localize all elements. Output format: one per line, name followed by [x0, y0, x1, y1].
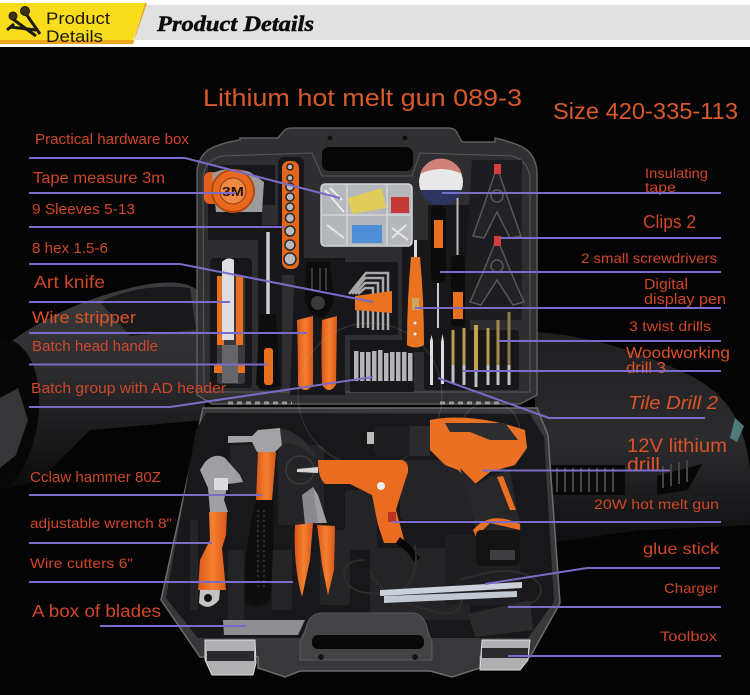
- header bar: [0, 0, 750, 47]
- label: Insulating tape: Insulating: [645, 165, 708, 181]
- handle opening: [322, 147, 413, 171]
- label: 8 hex 1.5-6: 8 hex 1.5-6: [32, 241, 108, 257]
- label: Clips 2: Clips 2: [643, 212, 696, 232]
- toolbox: lower tray: [161, 323, 560, 677]
- title: Lithium hot melt gun 089-3: [203, 85, 522, 112]
- tab label: [46, 9, 110, 46]
- label: Insulating tape: tape: [645, 179, 676, 195]
- label: 20W hot melt gun: 20W hot melt gun: [594, 496, 719, 512]
- label: adjustable wrench 8": adjustable wrench 8": [30, 516, 172, 531]
- label: 12V lithium drill: drill: [627, 455, 660, 476]
- label: Batch head handle: Batch head handle: [32, 339, 158, 355]
- tape measure: [204, 169, 264, 212]
- cords: [344, 545, 541, 613]
- screwdriver: [256, 232, 280, 388]
- label: 12V lithium drill: [483, 436, 727, 476]
- background car: left side: [0, 283, 205, 490]
- label: 9 Sleeves 5-13: 9 Sleeves 5-13: [32, 202, 135, 218]
- label: Digital display pen: Digital: [644, 276, 688, 293]
- label: Art knife: Art knife: [34, 272, 105, 292]
- moulded compartments: [190, 445, 520, 620]
- background car: right side: [535, 332, 750, 545]
- heading: Product Details: [156, 11, 314, 36]
- orange sleeve: [355, 291, 392, 313]
- label: Toolbox: Toolbox: [660, 628, 717, 644]
- clips: [470, 164, 524, 305]
- watermark rings: [286, 323, 520, 484]
- hex keys: [349, 273, 392, 330]
- latches: [205, 640, 256, 675]
- toolbox: upper lid: [197, 128, 537, 404]
- icon: crossed tools: [7, 6, 40, 36]
- tab label: Product: [46, 9, 110, 28]
- combination pliers: [295, 487, 335, 597]
- two small screwdrivers: [431, 198, 465, 328]
- label: Practical hardware box: [29, 132, 340, 198]
- yellow tab: [0, 3, 145, 44]
- charger: [468, 600, 533, 637]
- socket strip: [282, 161, 299, 269]
- art knife: [214, 258, 245, 384]
- label: glue stick: glue stick: [643, 541, 720, 558]
- glue gun: [297, 460, 417, 560]
- label: Charger: Charger: [664, 580, 718, 596]
- label: glue stick: [485, 541, 720, 584]
- cordless drill: [367, 418, 527, 566]
- label: Woodworking drill 3: Woodworking: [626, 345, 730, 362]
- right labels: [392, 165, 730, 656]
- batch bits: [354, 350, 412, 381]
- label: Batch group with AD header: [29, 377, 373, 407]
- label: Wire stripper: Wire stripper: [32, 308, 136, 327]
- label: 2 small screwdrivers: 2 small screwdrivers: [581, 250, 717, 266]
- left labels: [29, 132, 373, 626]
- label: Digital display pen: display pen: [644, 291, 726, 308]
- grey title band: [135, 5, 750, 40]
- label: 3 twist drills: 3 twist drills: [629, 318, 711, 334]
- label: 8 hex 1.5-6: [29, 241, 373, 302]
- claw hammer: [228, 428, 317, 607]
- label: Woodworking drill 3: drill 3: [626, 360, 666, 377]
- label: Woodworking drill 3: [463, 345, 730, 377]
- twist and woodworking drills: [453, 312, 509, 387]
- tab label: Details: [46, 27, 103, 46]
- label: Practical hardware box: Practical hardware box: [35, 132, 190, 148]
- label: Digital display pen: [415, 276, 726, 308]
- blades box: [223, 620, 305, 635]
- insulating tape: [419, 159, 463, 205]
- lid shell: [197, 128, 537, 404]
- label: Tape measure 3m: Tape measure 3m: [33, 170, 165, 187]
- tray shell: [161, 408, 560, 677]
- label: A box of blades: A box of blades: [32, 601, 161, 621]
- tape measure: 3M: [222, 184, 244, 199]
- label: Wire cutters 6": Wire cutters 6": [30, 555, 133, 571]
- wire stripper: [297, 262, 337, 390]
- label: 12V lithium drill: 12V lithium: [627, 436, 727, 457]
- size note: Size 420-335-113: [553, 98, 738, 124]
- label: Cclaw hammer 80Z: Cclaw hammer 80Z: [30, 470, 161, 486]
- label: Batch group with AD header: Batch group with AD header: [31, 381, 226, 397]
- label: Tile Drill 2: [438, 378, 719, 418]
- hinges: [228, 402, 502, 404]
- adjustable wrench: [198, 456, 243, 607]
- tray interior: [166, 413, 554, 638]
- glue sticks: [380, 582, 522, 603]
- label: Insulating tape: [442, 165, 721, 195]
- hardware box: [321, 184, 412, 246]
- tray recesses: [208, 157, 522, 395]
- handle: [300, 613, 432, 660]
- tile drills: [430, 334, 444, 385]
- label: Tile Drill 2: Tile Drill 2: [628, 392, 719, 413]
- digital display pen: [407, 240, 424, 348]
- inner tray: [203, 153, 530, 392]
